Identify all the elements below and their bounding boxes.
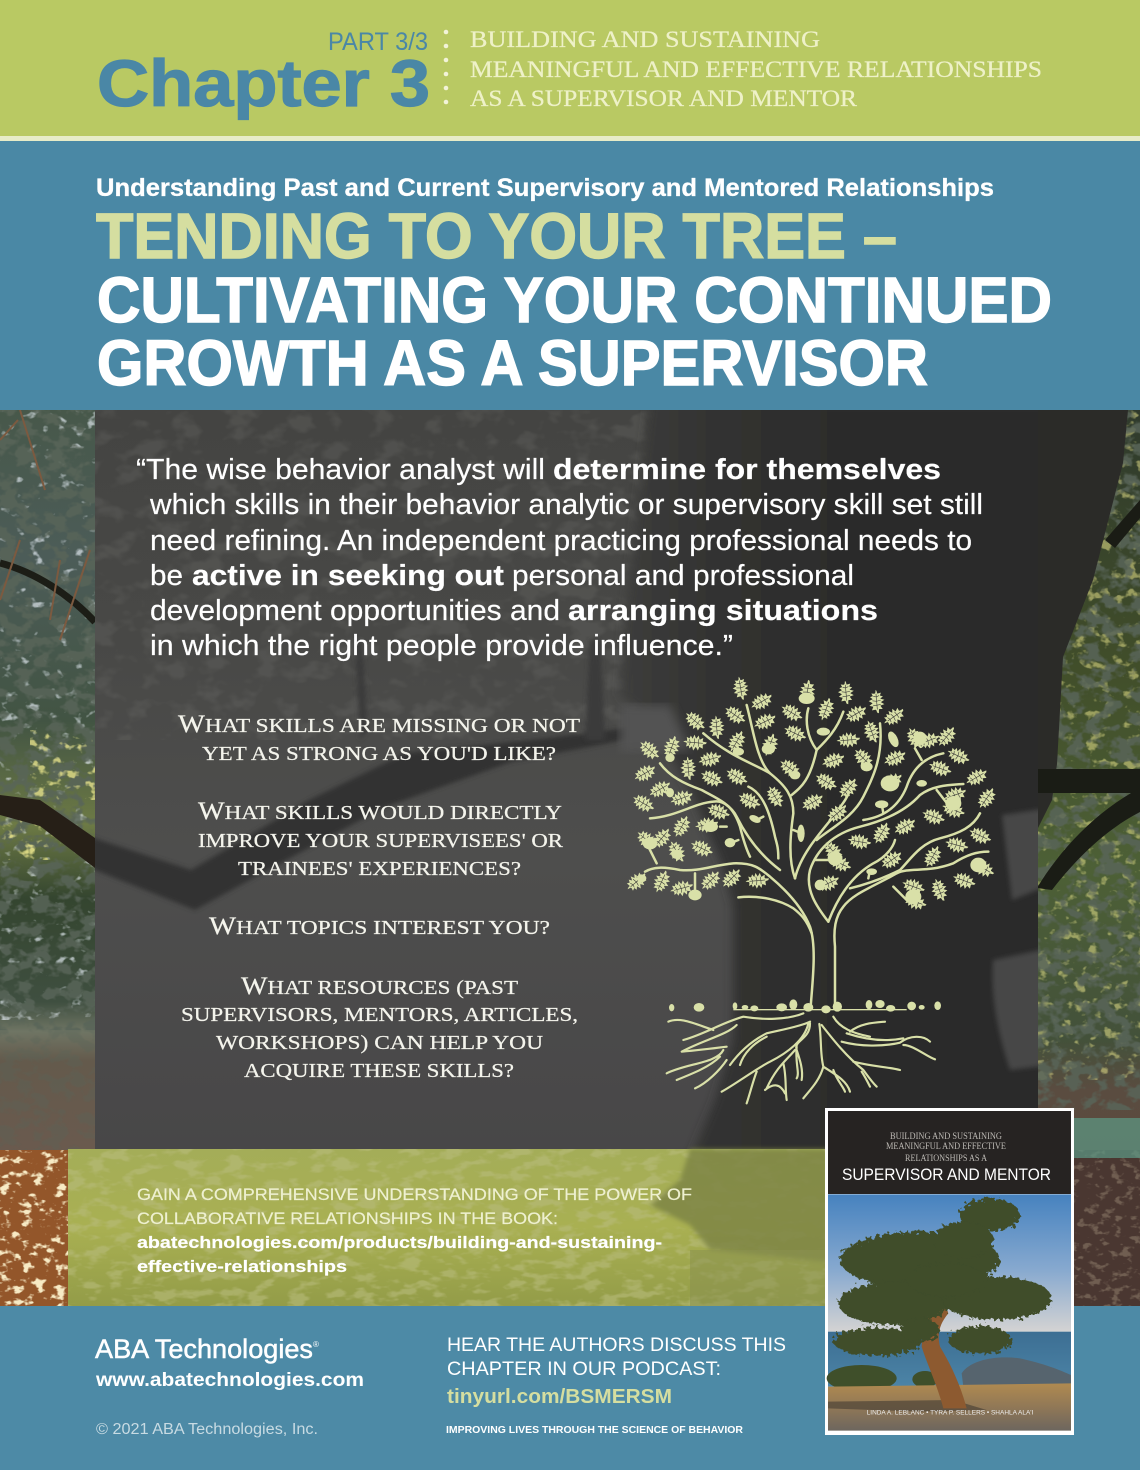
- chapter heading: Chapter 3: [97, 46, 430, 120]
- book title block: RELATIONSHIPS AS A: [905, 1154, 987, 1164]
- book photo of tree: LINDA A. LEBLANC • TYRA P. SELLERS • SHAHLA ALA'I: [867, 1409, 1033, 1416]
- tree leaves: [623, 675, 1000, 913]
- reflection questions: IMPROVE YOUR SUPERVISEES' OR: [198, 830, 563, 852]
- callout text: abatechnologies.com/products/building-and-sustaining-: [137, 1233, 662, 1252]
- tree seed pods: [637, 693, 986, 904]
- reflection questions: WHAT SKILLS ARE MISSING OR NOT: [178, 711, 581, 738]
- teal title band: [0, 141, 1140, 410]
- part label: PART 3/3: [328, 28, 428, 56]
- tree branches: [645, 705, 988, 1007]
- quote: which skills in their behavior analytic or supervisory skill set still: [149, 489, 983, 521]
- panel: green book callout: [68, 1149, 828, 1306]
- book photo of tree: [827, 1194, 1071, 1431]
- dotted divider: [444, 30, 448, 104]
- podcast text: HEAR THE AUTHORS DISCUSS THIS: [447, 1334, 786, 1356]
- reflection questions: WHAT TOPICS INTEREST YOU?: [209, 913, 550, 940]
- quote: determine for themselves: [553, 454, 941, 486]
- callout text: effective-relationships: [137, 1257, 347, 1276]
- quote: development opportunities and: [150, 595, 560, 627]
- callout text: GAIN A COMPREHENSIVE UNDERSTANDING OF THE POWER OF: [137, 1185, 692, 1204]
- quote: in which the right people provide influence.”: [150, 630, 733, 662]
- quote: need refining. An independent practicing professional needs to: [150, 525, 972, 557]
- website: www.abatechnologies.com: [95, 1370, 364, 1391]
- logo: ®: [313, 1340, 319, 1349]
- subtitle: Understanding Past and Current Supervisory and Mentored Relationships: [96, 174, 994, 202]
- reflection questions: [178, 711, 581, 1082]
- reflection questions: TRAINEES' EXPERIENCES?: [238, 858, 521, 880]
- title: CULTIVATING YOUR CONTINUED: [97, 264, 1052, 336]
- panel: dark quote and questions panel: [85, 400, 1060, 1160]
- reflection questions: ACQUIRE THESE SKILLS?: [244, 1060, 514, 1082]
- title: [96, 200, 1052, 399]
- book title in header: [470, 27, 1042, 112]
- quote: arranging situations: [568, 595, 878, 627]
- podcast text: CHAPTER IN OUR PODCAST:: [447, 1358, 721, 1380]
- quote: [136, 454, 983, 662]
- logo: ABA Technologies: [95, 1334, 313, 1364]
- book title in header: AS A SUPERVISOR AND MENTOR: [470, 86, 857, 112]
- podcast link: tinyurl.com/BSMERSM: [447, 1386, 672, 1408]
- ground line and stones: [669, 999, 941, 1013]
- quote: “The wise behavior analyst will: [136, 454, 545, 486]
- header divider: [0, 136, 1140, 141]
- quote: personal and professional: [512, 560, 854, 592]
- book title block: BUILDING AND SUSTAINING: [890, 1132, 1002, 1142]
- book title block: [828, 1111, 1071, 1194]
- title: GROWTH AS A SUPERVISOR: [97, 327, 928, 399]
- title: TENDING TO YOUR TREE –: [96, 200, 897, 272]
- book title block: SUPERVISOR AND MENTOR: [842, 1165, 1051, 1184]
- callout text: COLLABORATIVE RELATIONSHIPS IN THE BOOK:: [137, 1209, 558, 1228]
- copyright: © 2021 ABA Technologies, Inc.: [96, 1421, 318, 1438]
- quote: be: [150, 560, 183, 592]
- reflection questions: WORKSHOPS) CAN HELP YOU: [216, 1032, 543, 1054]
- footer band: [0, 1306, 1140, 1470]
- podcast text: [447, 1334, 786, 1380]
- book cover: [825, 1108, 1074, 1435]
- reflection questions: WHAT SKILLS WOULD DIRECTLY: [198, 798, 562, 825]
- icon: tree illustration: [623, 675, 1000, 1103]
- reflection questions: YET AS STRONG AS YOU'D LIKE?: [202, 743, 556, 765]
- quote: active in seeking out: [192, 560, 504, 592]
- callout text: [137, 1185, 692, 1276]
- book title in header: BUILDING AND SUSTAINING: [470, 27, 820, 53]
- header band: [0, 0, 1140, 136]
- reflection questions: SUPERVISORS, MENTORS, ARTICLES,: [181, 1004, 578, 1026]
- book title block: MEANINGFUL AND EFFECTIVE: [886, 1142, 1006, 1152]
- tree roots: [667, 1013, 935, 1103]
- book title in header: MEANINGFUL AND EFFECTIVE RELATIONSHIPS: [470, 57, 1042, 83]
- forest photo background: [0, 410, 1140, 1306]
- reflection questions: WHAT RESOURCES (PAST: [241, 973, 519, 1000]
- tagline: IMPROVING LIVES THROUGH THE SCIENCE OF BEHAVIOR: [446, 1424, 743, 1436]
